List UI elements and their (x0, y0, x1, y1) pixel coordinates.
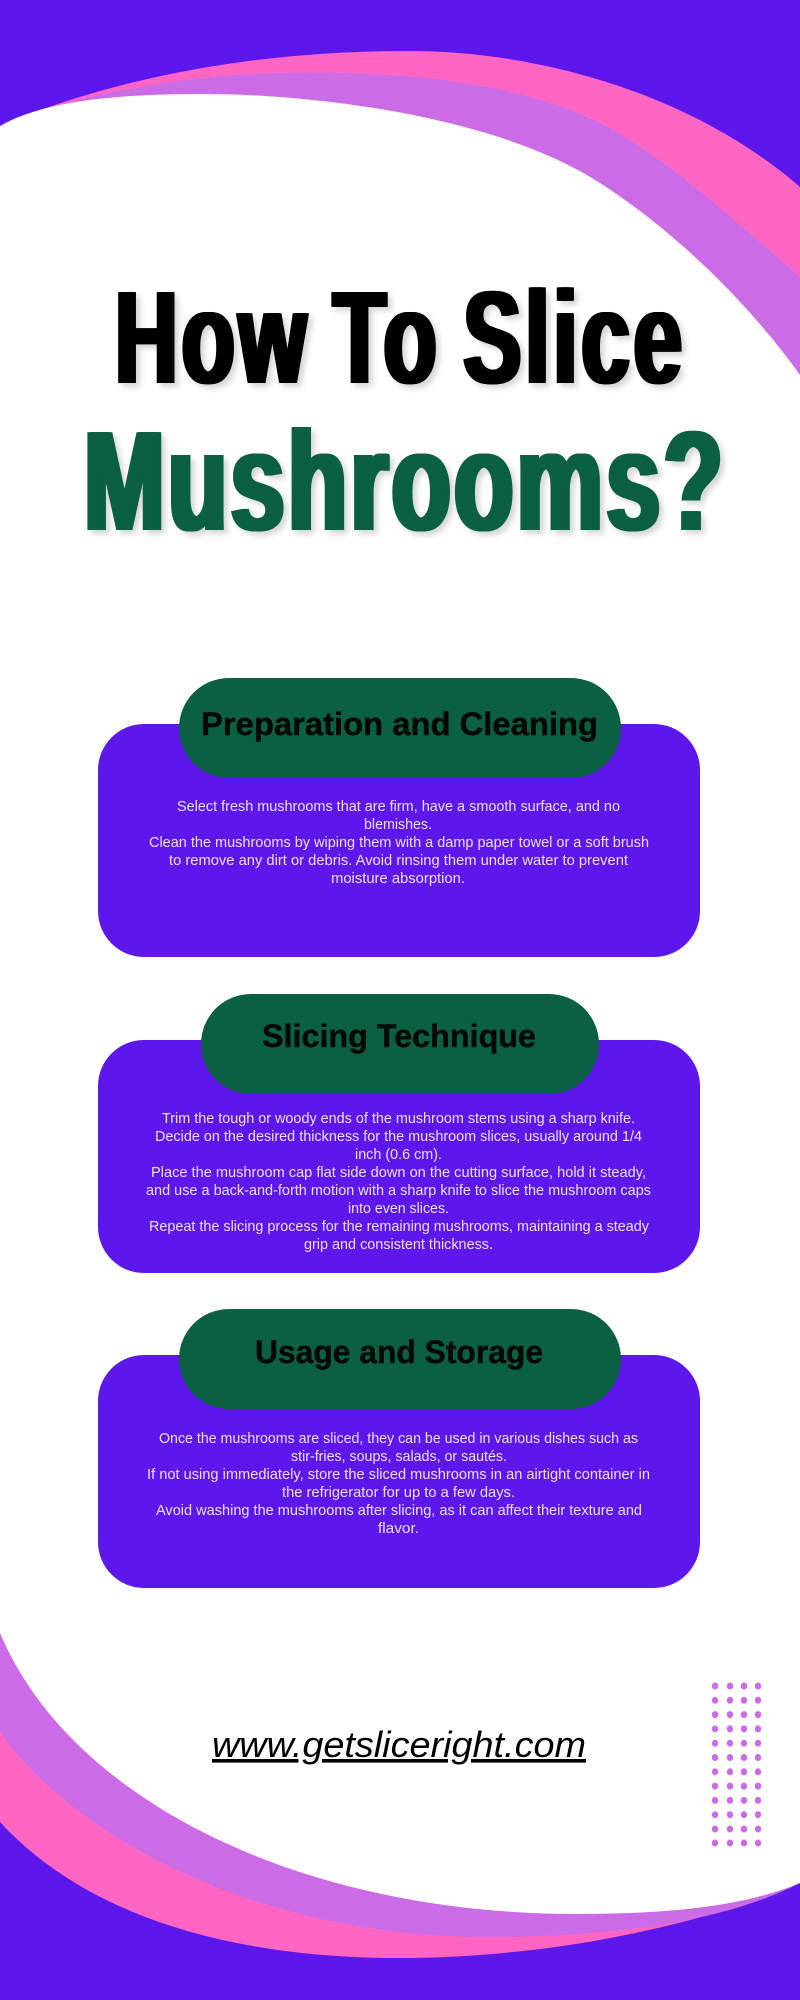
bottom wave: pink (0, 1600, 800, 1958)
title line: How To Slice: How To Slice (115, 264, 686, 411)
panel background (98, 1355, 700, 1588)
title (84, 264, 726, 561)
body text: and use a back-and-forth motion with a sharp knife to slice the mushroom caps (146, 1183, 651, 1199)
body text: Repeat the slicing process for the remaining mushrooms, maintaining a steady (149, 1219, 650, 1235)
heading pill (201, 994, 599, 1094)
body text: If not using immediately, store the sliced mushrooms in an airtight container in (147, 1467, 650, 1483)
body text: inch (0.6 cm). (355, 1147, 442, 1163)
panel background (98, 1040, 700, 1273)
panel: preparation and cleaning (98, 678, 700, 957)
heading pill (179, 678, 621, 778)
heading pill (179, 1309, 621, 1409)
panel: usage and storage (98, 1309, 700, 1588)
heading pill: Preparation and Cleaning (201, 706, 598, 742)
website link text: www.getsliceright.com (212, 1724, 586, 1765)
body text: into even slices. (348, 1201, 449, 1217)
body text: Avoid washing the mushrooms after slicing, as it can affect their texture and (156, 1503, 642, 1519)
top wave: lilac (0, 72, 800, 500)
body text: Clean the mushrooms by wiping them with a damp paper towel or a soft brush (149, 835, 649, 851)
body text (146, 1111, 651, 1253)
body text: Trim the tough or woody ends of the mushroom stems using a sharp knife. (162, 1111, 635, 1127)
body text (149, 799, 649, 887)
body text: flavor. (378, 1521, 419, 1537)
heading pill: Slicing Technique (262, 1018, 536, 1054)
body text: to remove any dirt or debris. Avoid rinsing them under water to prevent (169, 853, 628, 869)
body text (147, 1431, 650, 1537)
body text: Place the mushroom cap flat side down on the cutting surface, hold it steady, (151, 1165, 646, 1181)
body text: moisture absorption. (331, 871, 465, 887)
body text: the refrigerator for up to a few days. (282, 1485, 515, 1501)
panel background (98, 724, 700, 957)
top wave: pink (0, 51, 800, 500)
heading pill: Usage and Storage (255, 1334, 543, 1370)
body text: Once the mushrooms are sliced, they can be used in various dishes such as (159, 1431, 638, 1447)
decorative dot grid (712, 1682, 761, 1846)
bottom wave: lilac (0, 1600, 800, 1937)
body text: stir-fries, soups, salads, or sautés. (291, 1449, 507, 1465)
body text: Decide on the desired thickness for the mushroom slices, usually around 1/4 (155, 1129, 642, 1145)
title line: Mushrooms?: Mushrooms? (84, 402, 726, 561)
panel: slicing technique (98, 994, 700, 1273)
body text: blemishes. (364, 817, 432, 833)
body text: grip and consistent thickness. (304, 1237, 493, 1253)
body text: Select fresh mushrooms that are firm, have a smooth surface, and no (177, 799, 620, 815)
